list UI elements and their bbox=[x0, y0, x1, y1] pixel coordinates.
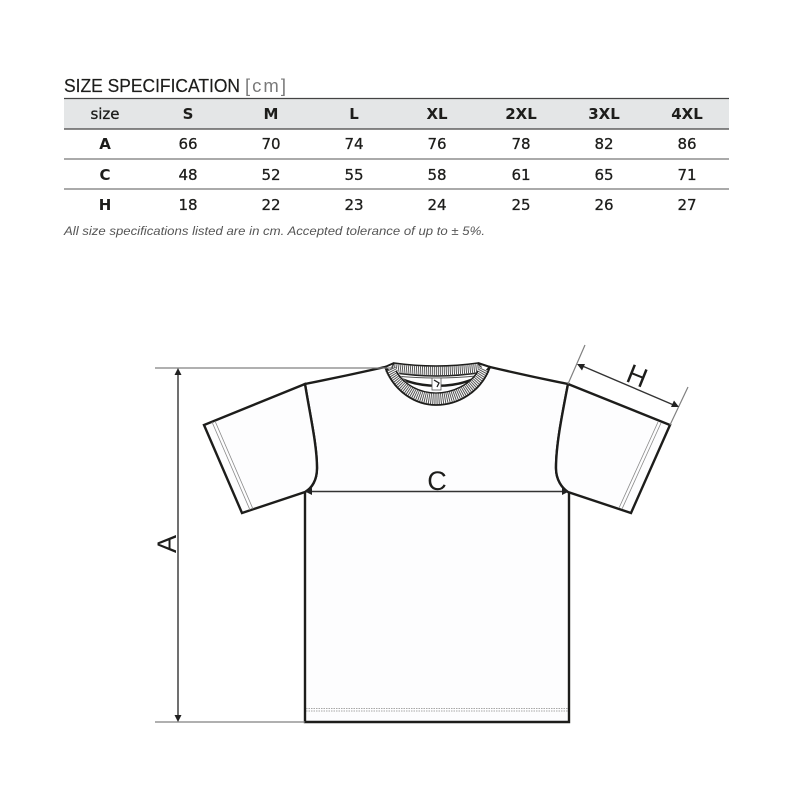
table header row: M bbox=[264, 105, 278, 123]
neck label bbox=[432, 378, 441, 390]
left sleeve bbox=[204, 384, 317, 513]
panel: size table bbox=[64, 98, 729, 214]
collar bbox=[385, 363, 490, 405]
dimension C: C bbox=[427, 466, 447, 496]
dimension A bbox=[152, 368, 392, 722]
table row C: 52 bbox=[261, 166, 281, 184]
table row A: 74 bbox=[344, 135, 364, 153]
table row C: 55 bbox=[344, 166, 364, 184]
table header row: 2XL bbox=[505, 105, 537, 123]
table row C: C bbox=[99, 166, 111, 184]
table row A: 70 bbox=[261, 135, 281, 153]
table row C: 48 bbox=[178, 166, 198, 184]
footnote: All size specifications listed are in cm. Accepted tolerance of up to ± 5%. bbox=[63, 226, 485, 238]
table row A: 86 bbox=[677, 135, 697, 153]
table row A: 66 bbox=[178, 135, 198, 153]
table row A: 78 bbox=[511, 135, 531, 153]
bottom hem stitching bbox=[306, 708, 568, 711]
table row H: 26 bbox=[594, 196, 614, 214]
table row C: 58 bbox=[427, 166, 447, 184]
table row C bbox=[99, 166, 697, 184]
table header row: size bbox=[90, 105, 120, 123]
table header row: 4XL bbox=[671, 105, 703, 123]
table row H: 23 bbox=[344, 196, 364, 214]
title unit: [cm] bbox=[245, 75, 286, 96]
table row A bbox=[99, 135, 697, 153]
dimension H bbox=[568, 345, 688, 425]
table header row: S bbox=[183, 105, 193, 123]
t-shirt diagram bbox=[204, 363, 670, 722]
table row H: 27 bbox=[677, 196, 697, 214]
table row H: 24 bbox=[427, 196, 447, 214]
table row C: 61 bbox=[511, 166, 531, 184]
table header row bbox=[64, 99, 729, 129]
table row H: 25 bbox=[511, 196, 531, 214]
table header row: L bbox=[349, 105, 359, 123]
table row H: H bbox=[99, 196, 111, 214]
table row H: 18 bbox=[178, 196, 198, 214]
t-shirt body bbox=[305, 367, 569, 722]
table header row: XL bbox=[426, 105, 448, 123]
table row H: 22 bbox=[261, 196, 281, 214]
dimension C bbox=[305, 466, 569, 496]
title: SIZE SPECIFICATION bbox=[64, 75, 240, 96]
table row C: 65 bbox=[594, 166, 614, 184]
dimension H: H bbox=[622, 358, 652, 394]
table row A: 82 bbox=[594, 135, 614, 153]
table header row: 3XL bbox=[588, 105, 620, 123]
table row H bbox=[99, 196, 697, 214]
dimension A: A bbox=[152, 535, 182, 553]
right sleeve bbox=[556, 384, 670, 513]
table row C: 71 bbox=[677, 166, 697, 184]
table row A: 76 bbox=[427, 135, 447, 153]
table row A: A bbox=[99, 135, 111, 153]
